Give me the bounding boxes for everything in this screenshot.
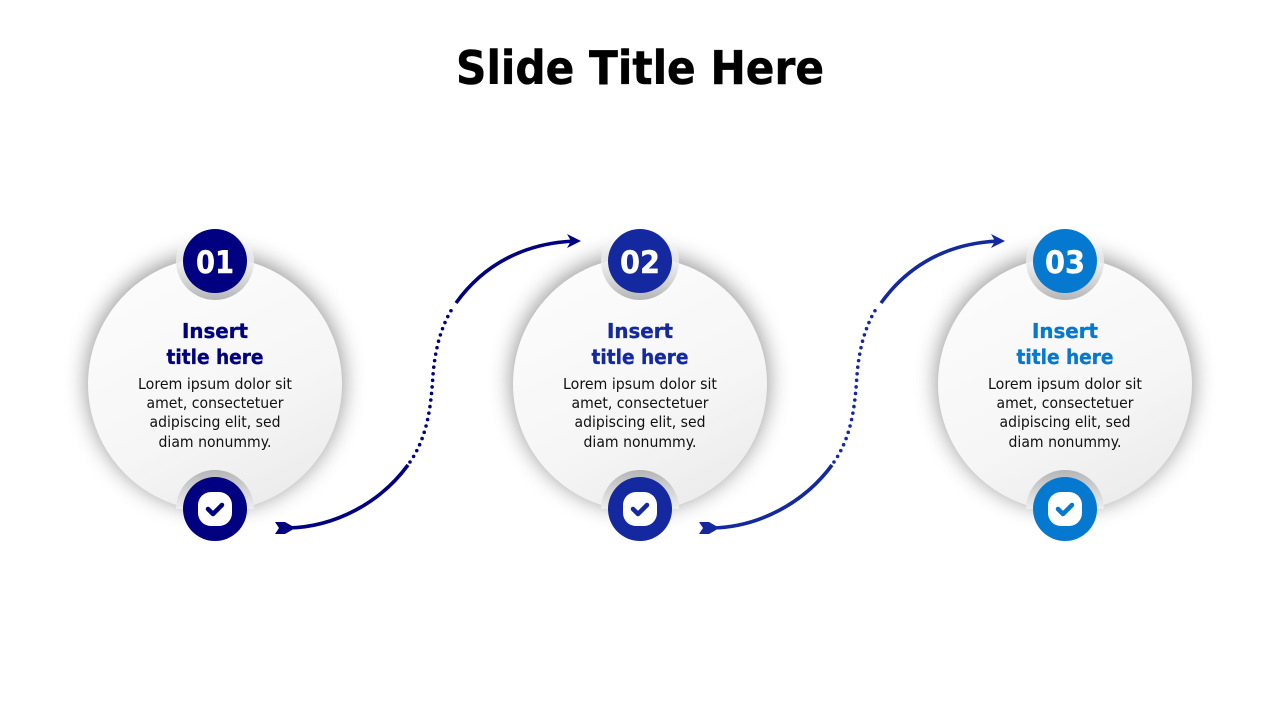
body text: diam nonummy.	[1008, 433, 1122, 451]
number badge 02: 02	[620, 245, 660, 281]
panel shadow	[512, 253, 768, 509]
body text: adipiscing elit, sed	[574, 413, 706, 431]
body text: diam nonummy.	[584, 433, 696, 451]
body text: amet, consectetuer	[996, 394, 1134, 412]
title: Slide Title Here	[456, 41, 824, 95]
panel: step 02	[512, 222, 768, 541]
circle card	[938, 257, 1192, 511]
heading: title here	[166, 345, 264, 369]
number badge 01: 01	[196, 245, 234, 281]
heading: Insert	[182, 319, 248, 343]
panel: step 03	[937, 222, 1193, 541]
body text: Lorem ipsum dolor sit	[988, 375, 1142, 393]
body text: amet, consectetuer	[146, 394, 284, 412]
icon: check badge	[176, 470, 254, 541]
number badge 03	[1026, 222, 1104, 300]
icon: check badge	[1026, 470, 1104, 541]
icon: check badge	[601, 470, 679, 541]
panel: step 01	[87, 222, 343, 541]
body text: Lorem ipsum dolor sit	[138, 375, 292, 393]
body text: adipiscing elit, sed	[150, 413, 280, 431]
arrow: step 02 to step 03	[699, 234, 1005, 534]
circle card	[513, 257, 767, 511]
heading: Insert	[607, 319, 673, 343]
body text: Lorem ipsum dolor sit	[563, 375, 717, 393]
panel shadow	[87, 253, 343, 509]
number badge 01	[176, 222, 254, 300]
heading: title here	[1016, 345, 1114, 369]
number badge 03: 03	[1045, 245, 1085, 281]
heading: title here	[592, 345, 688, 369]
body text: amet, consectetuer	[572, 394, 709, 412]
heading: Insert	[1032, 319, 1098, 343]
number badge 02	[601, 222, 679, 300]
circle card	[88, 257, 342, 511]
body text: adipiscing elit, sed	[1000, 413, 1130, 431]
arrow: step 01 to step 02	[275, 234, 581, 534]
body text: diam nonummy.	[158, 433, 272, 451]
panel shadow	[937, 253, 1193, 509]
